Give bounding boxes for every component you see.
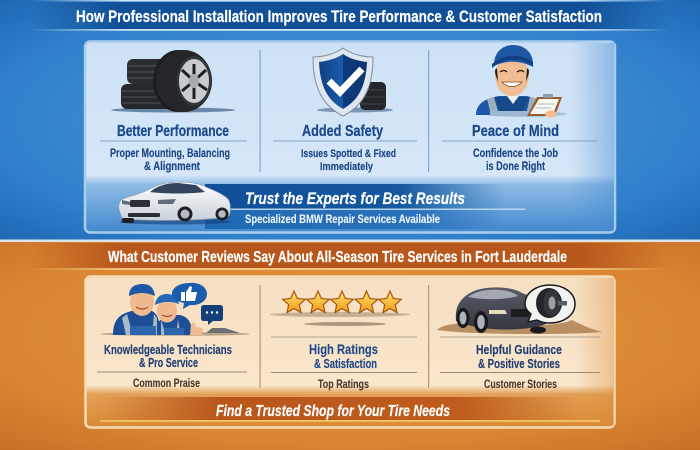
icon: smiling mechanic with clipboard — [476, 45, 567, 118]
title banner: customer reviews: What Customer Reviews Say About All-Season Tire Services in Fort Lauderdale — [108, 249, 567, 266]
text: high ratings and satisfaction — [309, 341, 378, 371]
panel: customer review highlights — [86, 276, 614, 428]
text: confidence the job is done right: is Done Right — [486, 161, 545, 173]
text: mounting, balancing and alignment — [110, 148, 230, 173]
banner: find a trusted shop: Find a Trusted Shop for Your Tire Needs — [216, 403, 450, 420]
icon: two technicians with thumbs up and chat bubbles — [100, 283, 250, 336]
text: confidence the job is done right — [473, 148, 558, 173]
text: helpful guidance and positive stories — [476, 342, 562, 371]
icon: dark car with tire speech bubble — [437, 285, 602, 334]
text: helpful guidance and positive stories: Helpful Guidance — [476, 342, 562, 357]
heading: peace of mind: Peace of Mind — [472, 123, 559, 140]
text: issues spotted and fixed — [301, 148, 396, 173]
banner: find a trusted shop — [100, 397, 600, 422]
heading: added safety: Added Safety — [302, 123, 383, 140]
panel: professional installation benefits — [85, 42, 615, 232]
text: helpful guidance and positive stories: & Positive Stories — [478, 356, 560, 371]
background: blue section — [0, 0, 700, 241]
text: issues spotted and fixed: Immediately — [320, 161, 374, 173]
heading: better performance: Better Performance — [117, 123, 229, 140]
text: knowledgeable technicians and pro service: Knowledgeable Technicians — [104, 343, 232, 357]
icon: shield with check mark — [313, 48, 393, 116]
icon: white BMW sedan — [119, 182, 231, 224]
text: knowledgeable technicians and pro service — [104, 343, 232, 370]
text: confidence the job is done right: Confidence the Job — [473, 148, 558, 160]
icon: stacked tires — [111, 50, 235, 112]
label: top ratings: Top Ratings — [318, 379, 369, 391]
icon: five star rating — [270, 291, 410, 326]
text: mounting, balancing and alignment: & Alignment — [144, 161, 200, 173]
banner: trust the experts — [205, 184, 525, 229]
background: orange section — [0, 241, 700, 450]
text: issues spotted and fixed: Issues Spotted & Fixed — [301, 148, 396, 160]
banner: trust the experts: Specialized BMW Repair Services Available — [245, 212, 440, 226]
label: common praise: Common Praise — [133, 378, 200, 390]
title banner: installation — [30, 0, 670, 31]
text: mounting, balancing and alignment: Proper Mounting, Balancing — [110, 148, 230, 160]
text: knowledgeable technicians and pro service: & Pro Service — [139, 356, 198, 370]
title banner: customer reviews — [30, 243, 670, 270]
text: high ratings and satisfaction: High Ratings — [309, 341, 378, 357]
label: customer stories: Customer Stories — [484, 379, 557, 391]
banner: trust the experts: Trust the Experts for Best Results — [245, 189, 465, 208]
text: high ratings and satisfaction: & Satisfaction — [314, 357, 377, 371]
